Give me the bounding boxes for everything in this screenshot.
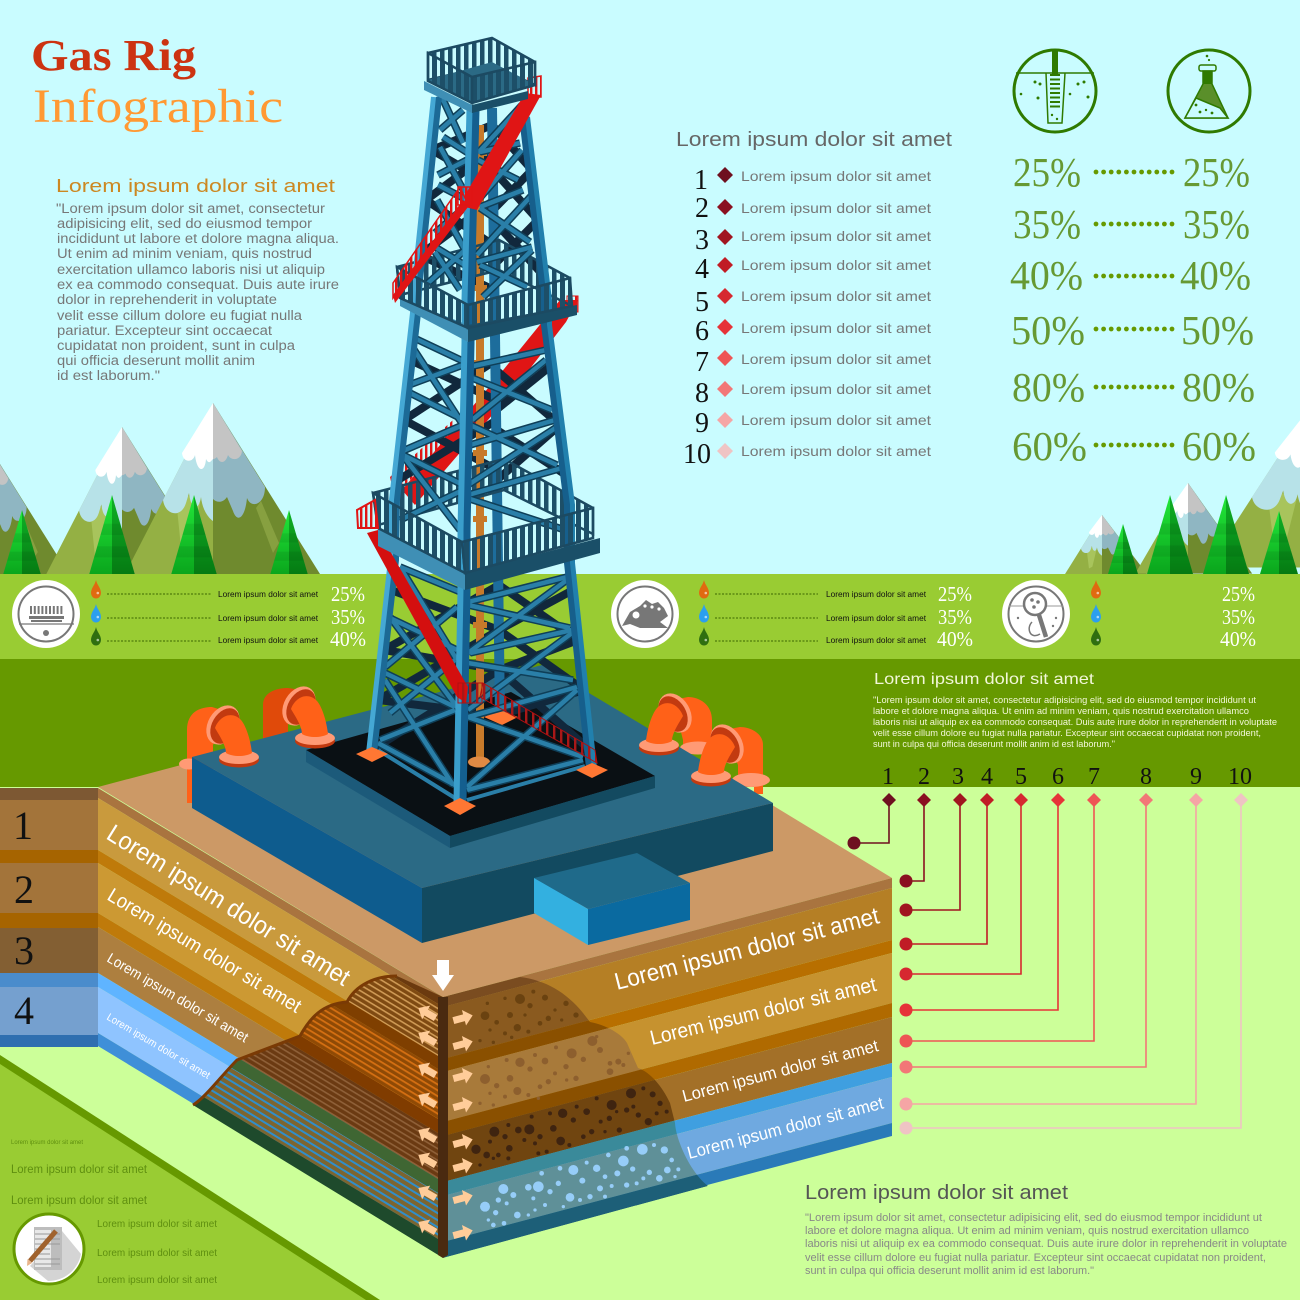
icon: shale layers xyxy=(611,580,679,648)
list numbers: 1 xyxy=(694,165,708,196)
connector dots xyxy=(848,836,912,1134)
icon: document and pencil xyxy=(14,1214,84,1284)
cutaway: right rock strata xyxy=(443,977,708,1258)
connector numbers: 8 xyxy=(1140,764,1152,790)
dark green band xyxy=(0,659,1300,787)
tier 1 back rails xyxy=(373,459,593,534)
bottom right text block: labore et dolore magna aliqua. Ut enim ad minim veniam, quis nostrud exercitation ullamco xyxy=(805,1225,1249,1237)
left leg xyxy=(369,97,439,753)
upper section xyxy=(480,143,520,152)
dark band text block: "Lorem ipsum dolor sit amet, consectetur adipisicing elit, sed do eiusmod tempor incididunt ut xyxy=(873,695,1256,706)
band numbers: 2 xyxy=(14,867,34,912)
intro text block xyxy=(56,175,339,383)
list numbers: 5 xyxy=(695,287,709,318)
dashed leaders xyxy=(107,594,212,641)
intro text block: Lorem ipsum dolor sit amet xyxy=(56,175,335,196)
percentages xyxy=(330,582,366,651)
bottom right text block xyxy=(805,1182,1287,1277)
connector numbers: 5 xyxy=(1015,764,1027,790)
percentages xyxy=(1220,582,1256,651)
bottom left text list xyxy=(11,1140,217,1286)
left fir trees xyxy=(3,495,308,575)
orange pipe elbows xyxy=(200,680,750,786)
left face layer labels: Lorem ipsum dolor sit amet xyxy=(103,884,305,1018)
connector numbers: 3 xyxy=(952,764,964,790)
band numbers xyxy=(13,803,34,1033)
rear cross braces xyxy=(372,125,590,750)
left face layer labels: Lorem ipsum dolor sit amet xyxy=(102,819,355,992)
intro text block: cupidatat non proident, sunt in culpa xyxy=(57,338,296,353)
icon: burner xyxy=(12,580,80,648)
crown front rails xyxy=(428,53,472,103)
intro text block: dolor in reprehenderit in voluptate xyxy=(57,292,277,307)
intro text block: qui officia deserunt mollit anim xyxy=(57,353,255,368)
small equipment box xyxy=(534,853,690,945)
pebbles layer 3 xyxy=(471,1086,669,1167)
middle section xyxy=(469,350,546,367)
crown platform xyxy=(424,38,535,113)
right face layer labels xyxy=(612,902,886,1163)
connector numbers: 2 xyxy=(918,764,930,790)
percentages: 40% xyxy=(937,627,973,651)
icon: drill in ground xyxy=(1014,50,1096,132)
bottom left text list: Lorem ipsum dolor sit amet xyxy=(11,1140,83,1146)
dark band text block: laboris nisi ut aliquip ex ea commodo consequat. Duis aute irure dolor in reprehenderit in voluptate xyxy=(873,717,1277,728)
numbered list xyxy=(676,128,952,470)
right face layer labels: Lorem ipsum dolor sit amet xyxy=(648,973,879,1050)
dark band text block: velit esse cillum dolore eu fugiat nulla pariatur. Excepteur sint occaecat cupidatat non proident, xyxy=(873,728,1261,739)
list labels: Lorem ipsum dolor sit amet xyxy=(741,351,931,367)
labels: Lorem ipsum dolor sit amet xyxy=(218,635,319,645)
list labels: Lorem ipsum dolor sit amet xyxy=(741,200,931,216)
bottom left green wedge xyxy=(0,1055,380,1300)
dotted leaders xyxy=(1096,172,1175,445)
list diamonds xyxy=(717,167,733,459)
drops xyxy=(91,580,101,646)
left face layer labels: Lorem ipsum dolor sit amet xyxy=(104,1011,212,1082)
left percent column xyxy=(1010,149,1087,469)
front leg xyxy=(457,110,476,802)
bottom right text block: Lorem ipsum dolor sit amet xyxy=(805,1182,1068,1204)
connector numbers: 6 xyxy=(1052,764,1064,790)
title xyxy=(31,31,283,133)
legend group 3 xyxy=(1002,580,1256,651)
list numbers: 7 xyxy=(695,347,709,378)
percentages: 35% xyxy=(1222,605,1255,629)
drops xyxy=(1091,580,1101,646)
bottom right text block: sunt in culpa qui officia deserunt mollit anim id est laborum." xyxy=(805,1265,1094,1277)
bottom left text list: Lorem ipsum dolor sit amet xyxy=(11,1193,148,1207)
left percent column: 25% xyxy=(1013,149,1081,195)
percentages: 35% xyxy=(331,605,365,629)
connector numbers: 9 xyxy=(1190,764,1202,790)
bottom left text list: Lorem ipsum dolor sit amet xyxy=(97,1247,217,1259)
right mountains xyxy=(1065,405,1300,574)
left percent column: 35% xyxy=(1013,201,1081,247)
list labels: Lorem ipsum dolor sit amet xyxy=(741,443,931,459)
percentages: 25% xyxy=(331,582,365,606)
percentages: 40% xyxy=(1220,627,1256,651)
upper stairway xyxy=(393,76,541,303)
cutaway: left contour line xyxy=(193,976,397,1105)
right percent column: 25% xyxy=(1183,149,1250,195)
right fir trees xyxy=(1108,495,1298,574)
intro text block: Ut enim ad minim veniam, quis nostrud xyxy=(57,246,312,261)
icon: flask xyxy=(1168,50,1250,132)
platform left side xyxy=(192,757,422,943)
list numbers: 3 xyxy=(695,225,709,256)
crown floor xyxy=(424,81,472,113)
rear pipe sections xyxy=(179,688,770,803)
intro text block: incididunt ut labore et dolore magna aliqua. xyxy=(57,231,339,246)
right leg xyxy=(522,117,594,768)
connector numbers: 1 xyxy=(882,764,894,790)
intro text block: id est laborum." xyxy=(57,368,160,383)
pebbles water layer xyxy=(480,1143,680,1227)
flow arrows right xyxy=(451,1008,475,1243)
intro text block: pariatur. Excepteur sint occaecat xyxy=(57,323,272,338)
percentages xyxy=(937,582,973,651)
flow arrows left xyxy=(414,1001,440,1239)
intro text block: exercitation ullamco laboris nisi ut aliquip xyxy=(57,262,325,277)
list numbers xyxy=(683,165,711,470)
left face layer labels xyxy=(102,819,355,1082)
list labels: Lorem ipsum dolor sit amet xyxy=(741,288,931,304)
intro text block: adipisicing elit, sed do eiusmod tempor xyxy=(57,216,313,231)
foot plates xyxy=(356,747,608,815)
dark band text block: sunt in culpa qui officia deserunt mollit anim id est laborum." xyxy=(873,739,1115,750)
connector numbers: 10 xyxy=(1228,764,1252,790)
list labels: Lorem ipsum dolor sit amet xyxy=(741,257,931,273)
rear stairway xyxy=(390,296,578,505)
base ties xyxy=(378,750,585,800)
right face layer labels: Lorem ipsum dolor sit amet xyxy=(612,902,882,996)
drops xyxy=(699,580,709,646)
left percent column: 80% xyxy=(1012,364,1085,410)
dashed leaders xyxy=(715,594,818,641)
list numbers: 6 xyxy=(695,316,709,347)
list labels: Lorem ipsum dolor sit amet xyxy=(741,381,931,397)
percentage table xyxy=(1010,149,1256,469)
intro text block: "Lorem ipsum dolor sit amet, consectetur xyxy=(56,201,326,216)
left percent column: 40% xyxy=(1010,252,1083,298)
bottom right text block: velit esse cillum dolore eu fugiat nulla pariatur. Excepteur sint occaecat cupidatat non proident, xyxy=(805,1252,1266,1264)
pebbles in rock layers xyxy=(471,990,680,1227)
bottom right text block: "Lorem ipsum dolor sit amet, consectetur adipisicing elit, sed do eiusmod tempor incididunt ut xyxy=(805,1212,1262,1224)
green legend band xyxy=(0,574,1300,659)
list labels: Lorem ipsum dolor sit amet xyxy=(741,228,931,244)
percentages: 40% xyxy=(330,627,366,651)
black deck xyxy=(306,692,655,836)
back foot plate xyxy=(484,710,518,725)
labels: Lorem ipsum dolor sit amet xyxy=(218,613,319,623)
front cross braces xyxy=(378,93,583,790)
left percent column: 50% xyxy=(1011,307,1085,353)
pebbles layer 1 xyxy=(478,990,579,1044)
tier 2 platform floor xyxy=(400,298,577,342)
list labels xyxy=(741,168,931,459)
oil rig tower xyxy=(356,38,608,815)
lower section xyxy=(468,577,567,602)
right percent column: 35% xyxy=(1183,201,1250,247)
list heading: Lorem ipsum dolor sit amet xyxy=(676,128,952,151)
intro text block: velit esse cillum dolore eu fugiat nulla xyxy=(57,308,303,323)
bottom left text list: Lorem ipsum dolor sit amet xyxy=(97,1218,217,1230)
lower stairway xyxy=(367,530,597,763)
labels xyxy=(218,589,319,645)
left percent column: 60% xyxy=(1012,423,1087,469)
labels xyxy=(826,589,927,645)
connector numbers xyxy=(882,764,1252,790)
bottom left text list: Lorem ipsum dolor sit amet xyxy=(11,1162,148,1176)
percentages: 25% xyxy=(1222,582,1255,606)
dark band text block: Lorem ipsum dolor sit amet xyxy=(874,671,1095,688)
labels: Lorem ipsum dolor sit amet xyxy=(826,589,927,599)
title: Infographic xyxy=(33,80,283,133)
platform top xyxy=(192,665,773,888)
icon: magnifier xyxy=(1002,580,1070,648)
ground block: left legend bands xyxy=(0,788,98,1047)
tier 1 landing xyxy=(357,500,378,528)
bottom left text list: Lorem ipsum dolor sit amet xyxy=(97,1274,217,1286)
list labels: Lorem ipsum dolor sit amet xyxy=(741,320,931,336)
legend group 1 xyxy=(12,580,366,651)
list numbers: 8 xyxy=(695,378,709,409)
right face layer labels: Lorem ipsum dolor sit amet xyxy=(680,1036,881,1106)
labels: Lorem ipsum dolor sit amet xyxy=(218,589,319,599)
labels: Lorem ipsum dolor sit amet xyxy=(826,635,927,645)
deck lip xyxy=(306,750,450,848)
connector numbers: 7 xyxy=(1088,764,1100,790)
tier 1 front rails xyxy=(373,493,593,573)
ground block: left face strata xyxy=(98,788,443,1255)
back leg xyxy=(492,108,500,717)
connector diamonds xyxy=(882,793,1248,807)
intro text block: ex ea commodo consequat. Duis aute irure xyxy=(57,277,339,292)
list numbers: 10 xyxy=(683,439,711,470)
left mountains xyxy=(0,403,320,577)
right face layer labels: Lorem ipsum dolor sit amet xyxy=(685,1093,886,1163)
connector legend xyxy=(848,764,1252,1134)
crown deck xyxy=(428,62,535,103)
ground block: right face strata xyxy=(443,878,892,1255)
connector numbers: 4 xyxy=(981,764,993,790)
title: Gas Rig xyxy=(31,31,196,80)
band numbers: 1 xyxy=(13,803,33,848)
tier 2 back rails xyxy=(397,240,570,305)
band numbers: 3 xyxy=(14,928,34,973)
list labels: Lorem ipsum dolor sit amet xyxy=(741,412,931,428)
right percent column: 40% xyxy=(1180,252,1251,298)
platform right side xyxy=(422,803,773,943)
cutaway: left rock strata xyxy=(193,976,443,1258)
list numbers: 9 xyxy=(695,408,709,439)
right percent column xyxy=(1180,149,1256,469)
percentages: 25% xyxy=(938,582,972,606)
legend group 2 xyxy=(611,580,973,651)
icon: down arrow xyxy=(432,960,454,991)
dark band text block: labore et dolore magna aliqua. Ut enim ad minim veniam, quis nostrud exercitation ullamco xyxy=(873,706,1249,717)
list numbers: 2 xyxy=(695,193,709,224)
list numbers: 4 xyxy=(695,254,709,285)
right percent column: 60% xyxy=(1182,423,1256,469)
tier 1 platform floor xyxy=(378,528,600,590)
drilling platform xyxy=(192,665,773,943)
right percent column: 50% xyxy=(1181,307,1254,353)
connector lines xyxy=(854,800,1241,1128)
bottom right text block: laboris nisi ut aliquip ex ea commodo consequat. Duis aute irure dolor in reprehenderit in voluptate xyxy=(805,1238,1287,1250)
band numbers: 4 xyxy=(14,988,34,1033)
right percent column: 80% xyxy=(1182,364,1255,410)
crown back rails xyxy=(428,38,535,85)
pebbles layer 2 xyxy=(478,1035,630,1107)
labels: Lorem ipsum dolor sit amet xyxy=(826,613,927,623)
percentages: 35% xyxy=(938,605,972,629)
light green ground xyxy=(0,787,1300,1300)
list labels: Lorem ipsum dolor sit amet xyxy=(741,168,931,184)
left face layer labels: Lorem ipsum dolor sit amet xyxy=(104,951,251,1046)
dark band text block xyxy=(873,671,1277,750)
central drill string xyxy=(468,125,490,768)
ground block: top surface xyxy=(98,668,892,997)
drill pipe xyxy=(438,997,448,1258)
tier 2 front rails xyxy=(397,267,572,328)
